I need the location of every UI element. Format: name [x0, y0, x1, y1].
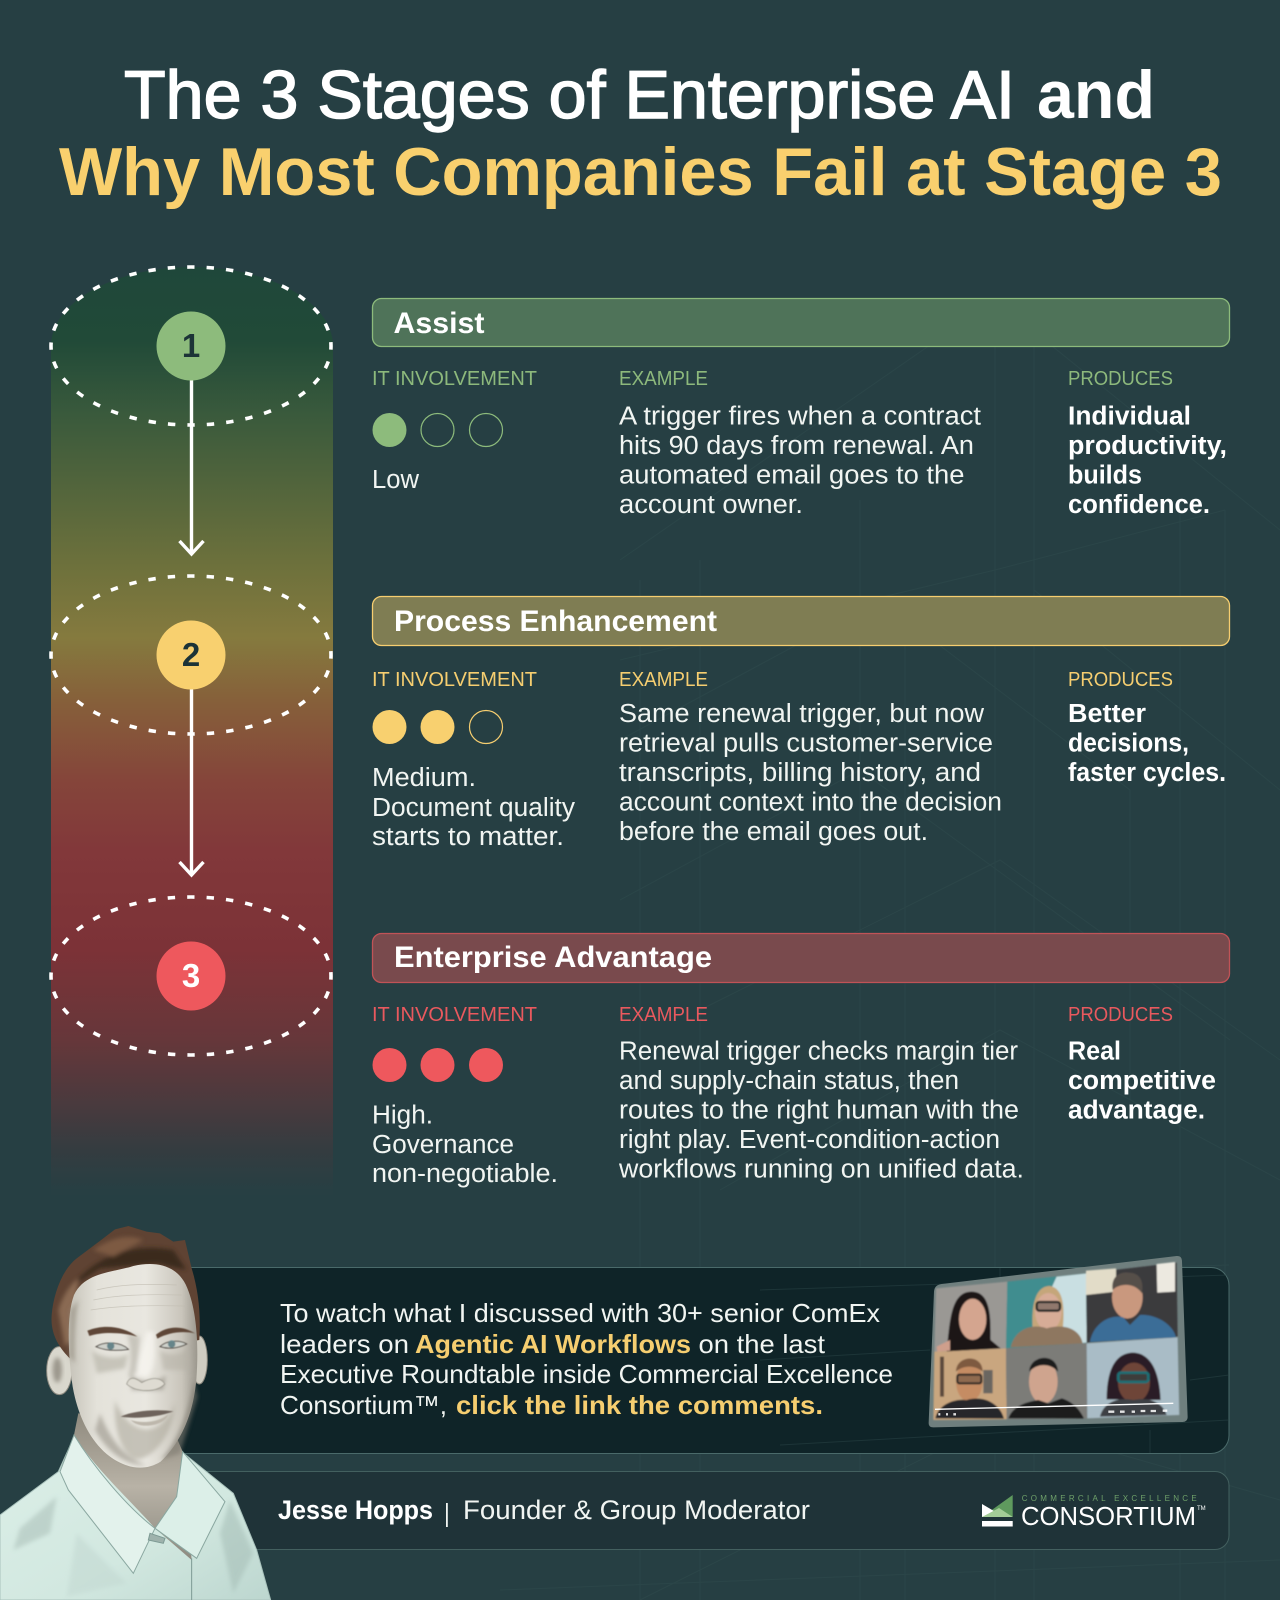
title: Why Most Companies Fail at Stage 3: [59, 134, 1222, 210]
call to action text: leaders on: [280, 1329, 409, 1359]
person 3: [1112, 1276, 1143, 1319]
tablet frame: [929, 1256, 1188, 1427]
person 2: [1032, 1286, 1064, 1330]
badge 2: [156, 620, 226, 690]
it involvement: Medium.: [372, 764, 476, 792]
example: A trigger fires when a contract: [619, 402, 981, 430]
example: retrieval pulls customer-service: [619, 730, 993, 758]
it involvement: Governance: [372, 1131, 514, 1159]
face: [69, 1264, 197, 1468]
title: and: [1037, 57, 1155, 133]
call to action text: To watch what I discussed with 30+ senior ComEx: [280, 1298, 880, 1328]
panel: stage 1 assist: [372, 298, 1230, 519]
it involvement: IT INVOLVEMENT: [372, 1004, 537, 1026]
badge 3: 3: [182, 957, 200, 994]
produces: Real: [1068, 1038, 1121, 1066]
badge 1: 1: [182, 327, 200, 364]
person 6: [1107, 1353, 1161, 1400]
eyes: [96, 1340, 187, 1350]
heading bar: [372, 596, 1230, 646]
it involvement: non-negotiable.: [372, 1160, 558, 1188]
heading bar: Process Enhancement: [394, 605, 717, 638]
it involvement: Document quality: [372, 794, 575, 822]
produces: productivity,: [1068, 432, 1227, 460]
example: EXAMPLE: [619, 669, 708, 691]
neck: [74, 1413, 192, 1560]
produces: PRODUCES: [1068, 1004, 1173, 1026]
person 5: [1029, 1360, 1058, 1404]
call to action text: Agentic AI Workflows: [415, 1329, 691, 1359]
it involvement: High.: [372, 1102, 433, 1130]
panel: stage 3 enterprise advantage: [372, 934, 1230, 1188]
presenter portrait illustration: [0, 1226, 271, 1600]
produces: competitive: [1068, 1067, 1216, 1095]
badge 3: [156, 942, 226, 1010]
mouth: [121, 1410, 173, 1426]
produces: [1068, 1004, 1216, 1124]
logo: commercial excellence consortium: TM: [1197, 1506, 1206, 1512]
person 4: [983, 1370, 993, 1393]
example: routes to the right human with the: [619, 1096, 1019, 1124]
example: hits 90 days from renewal. An: [619, 432, 974, 460]
face shading: [69, 1300, 197, 1465]
presenter name: Founder & Group Moderator: [463, 1495, 810, 1525]
it involvement: [372, 1004, 558, 1188]
example: Renewal trigger checks margin tier: [619, 1038, 1019, 1066]
collar: [60, 1435, 225, 1573]
it involvement: starts to matter.: [372, 823, 564, 851]
title: [59, 57, 1222, 210]
arrow 1 to 2: [180, 380, 204, 554]
shirt details: [148, 1533, 192, 1600]
logo: commercial excellence consortium: COMMERCIAL EXCELLENCE: [1022, 1494, 1197, 1503]
example: Same renewal trigger, but now: [619, 700, 985, 728]
nose: [127, 1378, 165, 1390]
example: before the email goes out.: [619, 818, 928, 846]
produces: PRODUCES: [1068, 368, 1173, 390]
title: The 3 Stages of Enterprise AI: [124, 57, 1015, 133]
produces: Better: [1068, 700, 1146, 728]
gradient column: [51, 267, 333, 1195]
it involvement: [372, 368, 537, 494]
produces: builds: [1068, 462, 1142, 490]
logo: commercial excellence consortium: CONSORTIUM: [1021, 1501, 1196, 1531]
produces: Individual: [1068, 402, 1191, 430]
call to action text: on the last: [698, 1329, 826, 1359]
forehead lines: [91, 1284, 185, 1310]
example: account owner.: [619, 491, 803, 519]
call to action text: click the link the comments.: [456, 1390, 823, 1420]
example: account context into the decision: [619, 788, 1002, 816]
call to action text: [280, 1298, 893, 1420]
video progress bar and controls: [935, 1403, 1173, 1414]
shirt: [0, 1435, 271, 1600]
logo: commercial excellence consortium: [982, 1494, 1206, 1531]
heading bar: [372, 298, 1230, 346]
stage 2 dashed ellipse: [51, 576, 331, 734]
panel: presenter footer: [160, 1472, 1229, 1550]
it involvement: [372, 669, 575, 851]
presenter name: [278, 1495, 810, 1527]
hair: [51, 1226, 200, 1363]
example: [619, 669, 1002, 846]
it involvement: IT INVOLVEMENT: [372, 669, 537, 691]
produces: confidence.: [1068, 491, 1210, 519]
example: transcripts, billing history, and: [619, 759, 981, 787]
panel pattern: [760, 1268, 1229, 1453]
arrow 2 to 3: [180, 689, 204, 875]
badge 1: [156, 312, 226, 380]
it involvement: Low: [372, 466, 420, 494]
panel: call to action: [160, 1256, 1229, 1454]
ears: [47, 1336, 207, 1395]
person 1: [947, 1292, 1001, 1351]
produces: [1068, 669, 1226, 787]
video call thumbnail: [929, 1256, 1188, 1427]
heading bar: [372, 934, 1230, 982]
example: EXAMPLE: [619, 1004, 708, 1026]
example: and supply-chain status, then: [619, 1067, 959, 1095]
heading bar: Enterprise Advantage: [394, 941, 712, 974]
call to action text: Executive Roundtable inside Commercial Excellence: [280, 1359, 893, 1389]
heading bar: Assist: [394, 307, 485, 340]
call to action text: Consortium™,: [280, 1390, 447, 1420]
it involvement: IT INVOLVEMENT: [372, 368, 537, 390]
presenter name: Jesse Hopps: [278, 1495, 433, 1525]
example: automated email goes to the: [619, 462, 964, 490]
brows: [87, 1327, 195, 1339]
produces: [1068, 368, 1227, 519]
example: [618, 1004, 1024, 1184]
stage 1 dashed ellipse: [51, 267, 331, 425]
shirt shading: [13, 1497, 253, 1597]
stage 3 dashed ellipse: [51, 897, 331, 1055]
example: EXAMPLE: [619, 368, 708, 390]
background pattern: [380, 300, 1280, 1600]
produces: decisions,: [1068, 730, 1189, 758]
screen tiles: [933, 1262, 1179, 1420]
example: right play. Event-condition-action: [619, 1126, 1000, 1154]
produces: advantage.: [1068, 1096, 1205, 1124]
produces: faster cycles.: [1068, 759, 1226, 787]
panel: stage 2 process enhancement: [372, 596, 1230, 851]
produces: PRODUCES: [1068, 669, 1173, 691]
example: [619, 368, 981, 519]
example: workflows running on unified data.: [618, 1156, 1024, 1184]
stage progression column: [51, 267, 333, 1195]
badge 2: 2: [182, 636, 200, 673]
